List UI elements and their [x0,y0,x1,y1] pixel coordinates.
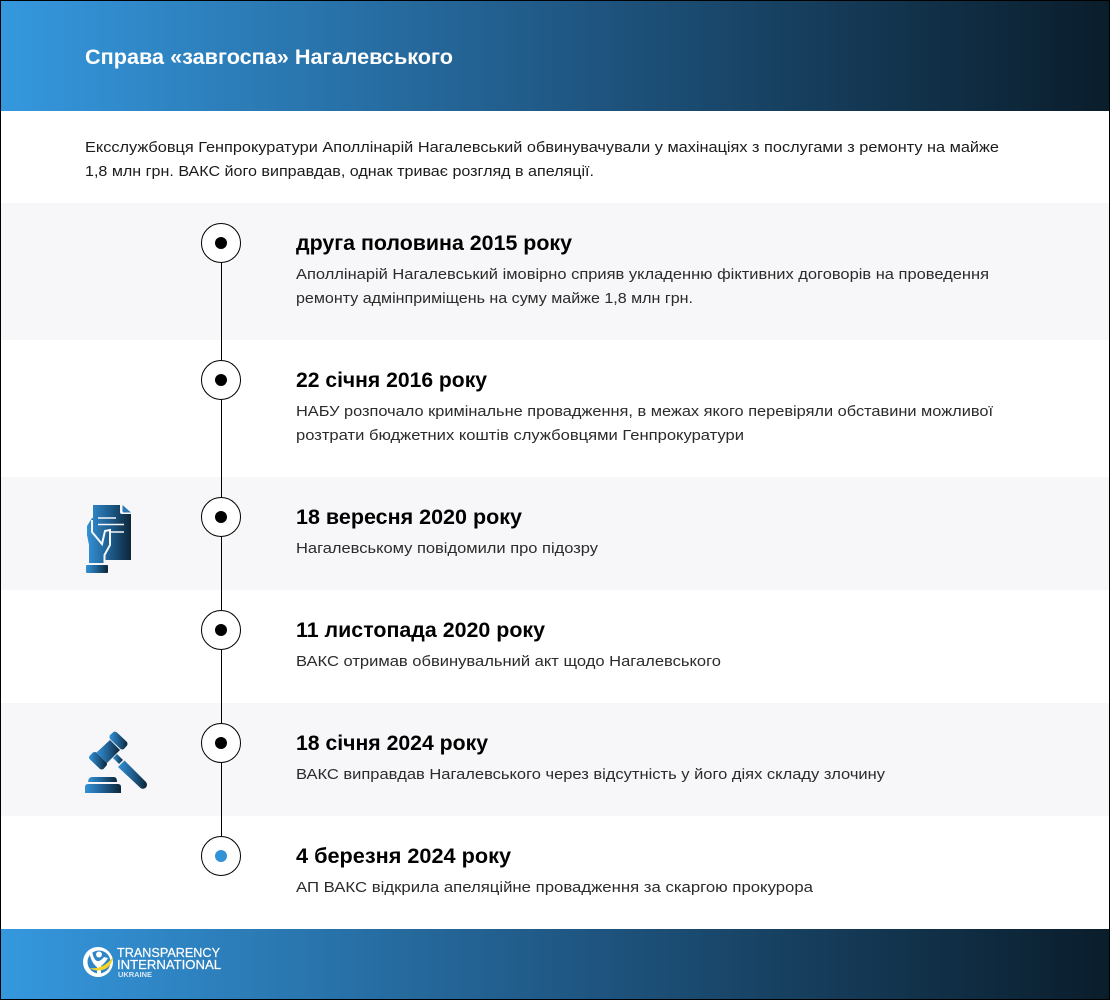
event heading: 4 березня 2024 року [296,845,511,868]
header banner [1,1,1109,111]
event description: ВАКС отримав обвинувальний акт щодо Нагалевського [296,653,721,670]
marker [202,224,240,262]
row background: 2015 [1,203,1109,340]
event heading: 18 січня 2024 року [296,732,488,755]
event heading: 18 вересня 2020 року [296,506,522,529]
event description: розтрати бюджетних коштів службовцями Генпрокуратури [296,427,744,444]
event description [296,266,989,307]
marker [202,724,240,762]
event heading: 11 листопада 2020 року [296,619,545,642]
event heading: друга половина 2015 року [296,232,572,255]
event heading: 22 січня 2016 року [296,369,487,392]
timeline line [220,243,222,856]
event description: ВАКС виправдав Нагалевського через відсутність у його діях складу злочину [296,766,886,783]
logo: Transparency International Ukraine: INTERNATIONAL [117,958,221,972]
logo: Transparency International Ukraine: TRANSPARENCY [117,946,221,960]
icon: judge gavel [85,732,147,793]
row background: 18 January 2024 [1,703,1109,816]
row background: 18 September 2020 [1,477,1109,590]
marker [202,610,240,650]
event description [296,403,994,444]
event: 22 January 2016 [202,360,994,444]
event description: ремонту адмінприміщень на суму майже 1,8 млн грн. [296,290,693,307]
event: second half of 2015 [202,224,989,307]
event description: Нагалевському повідомили про підозру [296,540,599,557]
logo: Transparency International Ukraine [83,946,221,979]
event: 18 September 2020 [202,498,599,557]
intro text [85,139,999,180]
icon: hand holding document [86,505,131,573]
marker [202,498,240,536]
title: Справа «завгоспа» Нагалевського [85,46,453,69]
event: 4 March 2024 [202,836,814,896]
event description: НАБУ розпочало кримінальне провадження, в межах якого перевіряли обставини можливої [296,403,994,420]
event: 18 January 2024 [202,724,886,783]
event description: АП ВАКС відкрила апеляційне провадження за скаргою прокурора [296,879,814,896]
intro text: Ексслужбовця Генпрокуратури Аполлінарій Нагалевський обвинувачували у махінаціях з послугами з ремонту на майже [85,139,999,156]
event: 11 November 2020 [202,610,721,670]
intro text: 1,8 млн грн. ВАКС його виправдав, однак триває розгляд в апеляції. [85,163,594,180]
event description: Аполлінарій Нагалевський імовірно сприяв укладенню фіктивних договорів на проведення [296,266,989,283]
marker [202,360,240,400]
marker [202,836,240,876]
footer banner [1,929,1109,999]
logo: Transparency International Ukraine: UKRAINE [118,972,152,979]
